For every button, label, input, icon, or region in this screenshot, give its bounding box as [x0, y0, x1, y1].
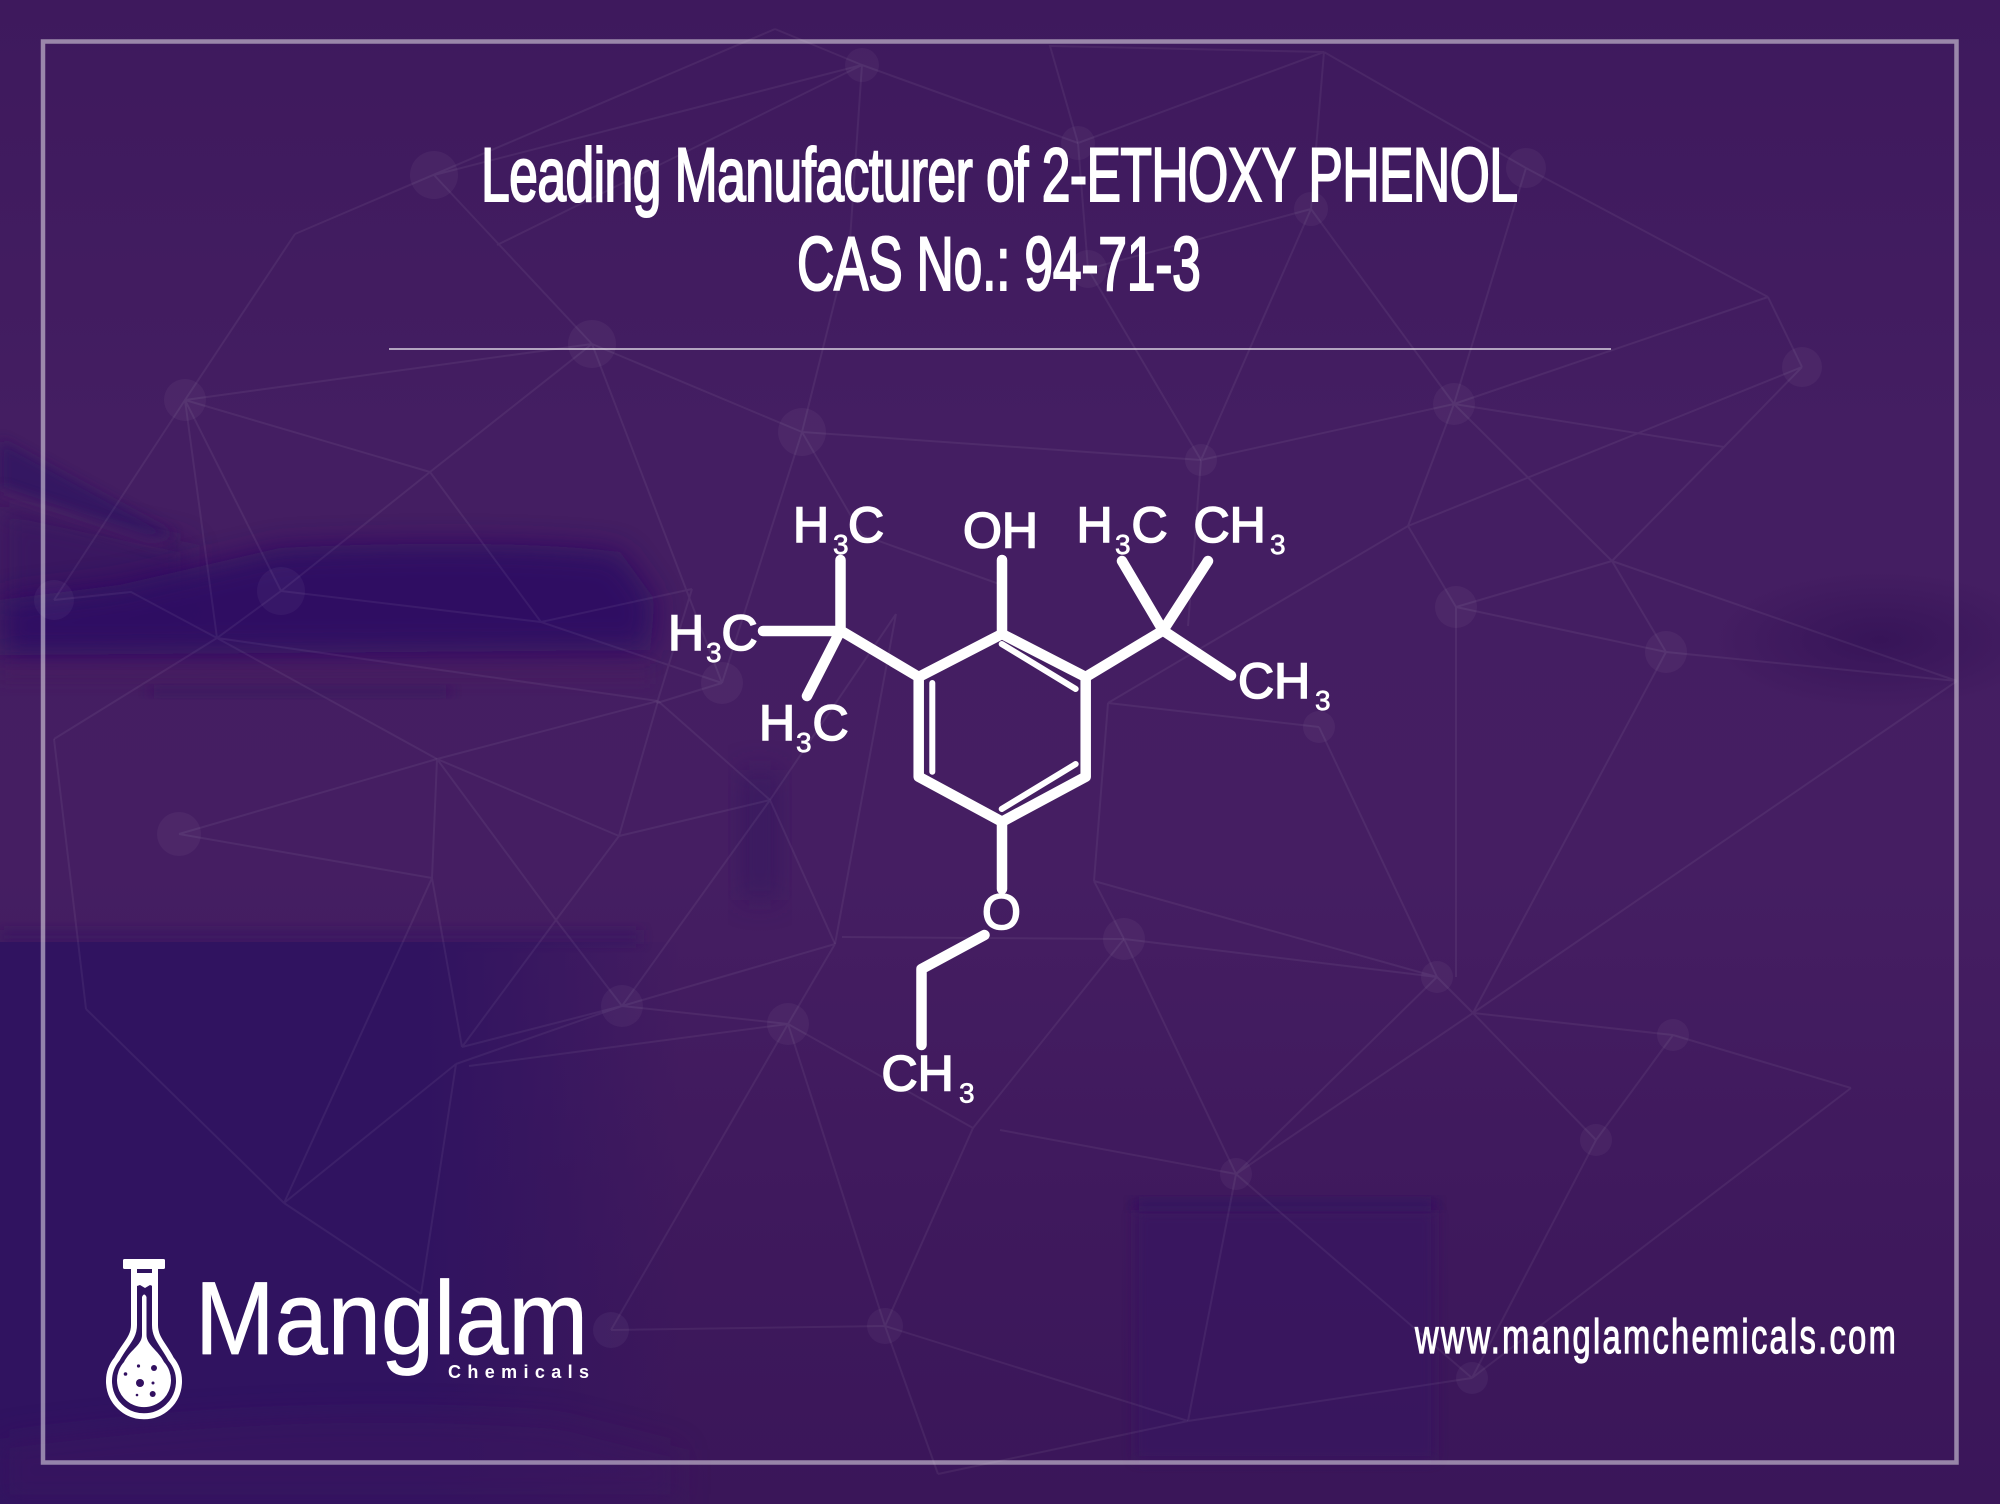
icon: round-bottom flask	[109, 1259, 179, 1416]
label: CH3 bottom: 3	[959, 1078, 975, 1108]
label: H3C upper left: 3	[833, 529, 849, 560]
label: H3C upper right: 3	[1115, 529, 1131, 560]
label: H3C lower left: C	[812, 695, 849, 751]
label: H3C upper right: H	[1076, 497, 1113, 553]
label: H3C left: H	[668, 605, 704, 661]
label: H3C left: 3	[706, 637, 722, 668]
label: O: O	[982, 884, 1021, 940]
label: CH3 upper right: 3	[1270, 529, 1286, 560]
title divider	[389, 348, 1611, 350]
chemical structure diagram	[668, 497, 1331, 1108]
title	[481, 132, 1518, 306]
label: H3C lower left: 3	[796, 727, 812, 758]
logo: Manglam Chemicals	[109, 1259, 589, 1416]
label: OH: OH	[963, 502, 1038, 558]
logo wordmark: Manglam	[195, 1261, 588, 1377]
label: H3C upper right: C	[1132, 497, 1168, 553]
logo tagline: Chemicals	[448, 1362, 589, 1382]
label: CH3 bottom: CH	[882, 1046, 954, 1102]
label: H3C left: C	[722, 605, 758, 661]
label: CH3 upper right: CH	[1194, 497, 1266, 553]
label: CH3 right: CH	[1238, 653, 1310, 709]
website URL: www.manglamchemicals.com	[1414, 1310, 1896, 1364]
label: CH3 right: 3	[1315, 685, 1331, 716]
title line 1: Leading Manufacturer of 2-ETHOXY PHENOL	[481, 132, 1518, 217]
title line 2: CAS number: CAS No.: 94-71-3	[797, 221, 1201, 306]
benzene ring and bonds	[763, 560, 1231, 1045]
label: H3C lower left: H	[759, 695, 795, 751]
label: H3C upper left: C	[848, 497, 884, 553]
label: H3C upper left: H	[793, 497, 829, 553]
